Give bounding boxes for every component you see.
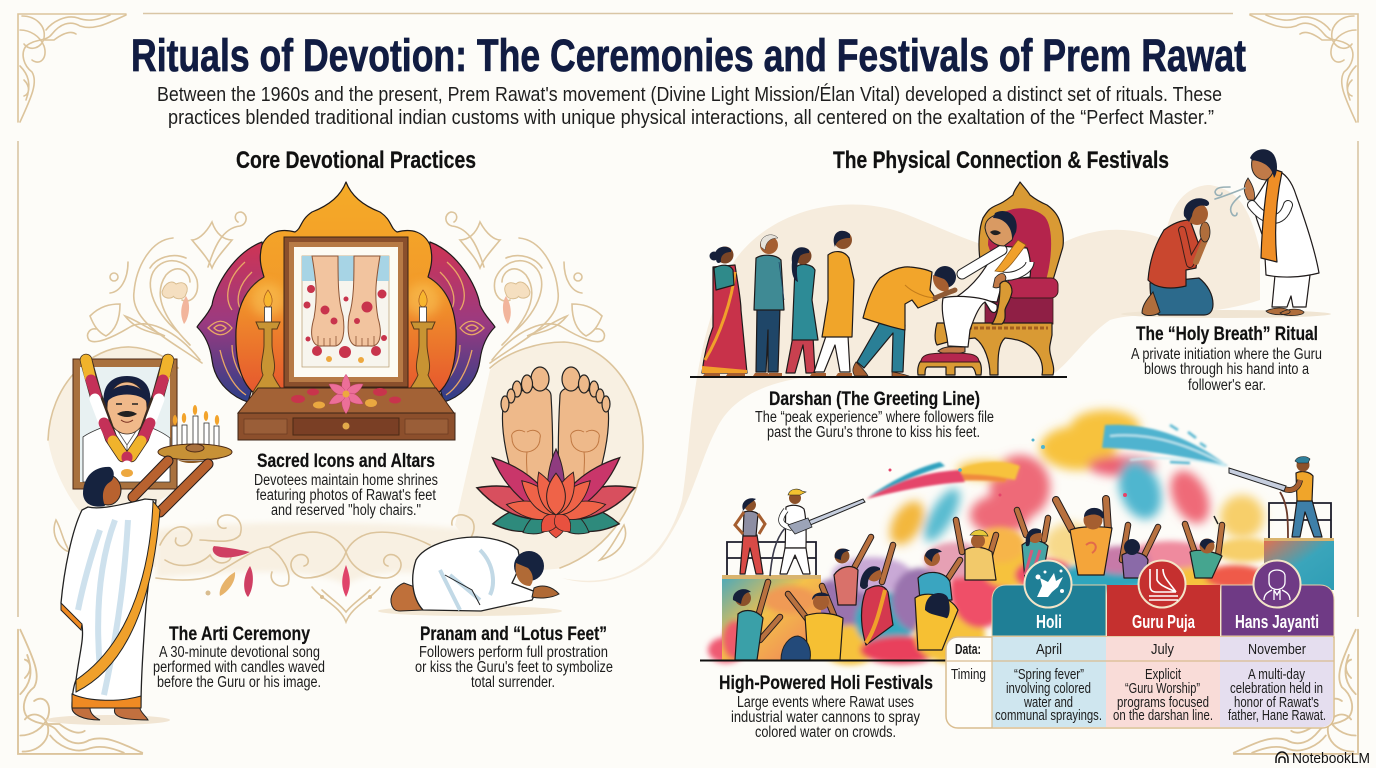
row: data: July	[1151, 641, 1174, 658]
woman in teal blouse	[1017, 510, 1048, 580]
text: holy breath: follower's ear.	[1188, 377, 1266, 394]
footstool	[918, 353, 981, 375]
text: pranam and lotus feet: Followers perform full prostration	[419, 644, 608, 661]
row: timing: A multi-day	[1248, 666, 1305, 683]
row: data: November	[1248, 641, 1306, 658]
text: holi festivals: colored water on crowds.	[755, 724, 896, 741]
text: pranam and lotus feet	[415, 624, 613, 691]
row: data	[955, 641, 1306, 658]
woman in teal dress	[786, 247, 818, 373]
seated guru	[938, 211, 1031, 354]
row: data: Data:	[955, 641, 981, 658]
row: data: April	[1036, 641, 1062, 658]
text: darshan: Darshan (The Greeting Line)	[769, 389, 980, 410]
text: arti ceremony	[153, 624, 325, 691]
right platform with cannon operator	[1229, 457, 1334, 590]
background wash: connecting swoosh	[562, 185, 1260, 582]
text: darshan: past the Guru's throne to kiss his feet.	[767, 424, 980, 441]
icon: notebook logo	[1276, 752, 1288, 763]
man in orange kurta	[810, 231, 854, 376]
text: holi festivals	[719, 673, 933, 741]
row: timing: water and	[1023, 694, 1073, 711]
row: timing: involving colored	[1006, 680, 1091, 697]
left spray	[866, 462, 1020, 499]
background wash: left beige blobs	[48, 342, 643, 585]
row: timing	[951, 666, 1326, 724]
text: holy breath: A private initiation where the Guru	[1131, 346, 1322, 363]
text: holi festivals: High-Powered Holi Festivals	[719, 673, 933, 694]
man in teal with bottle	[1185, 516, 1222, 578]
man in pink shirt	[834, 537, 871, 605]
text: holy breath	[1131, 324, 1322, 394]
illustration: holi colour clouds and crowd	[700, 410, 1334, 665]
illustration: soles of lotus feet	[501, 367, 610, 512]
text: arti ceremony: The Arti Ceremony	[169, 624, 310, 645]
column tints	[946, 637, 1334, 728]
candle stands	[252, 290, 439, 401]
text: holy breath: blows through his hand into a	[1144, 361, 1309, 378]
text: darshan: The “peak experience” where followers file	[755, 409, 994, 426]
header: hans jayanti: Hans Jayanti	[1235, 612, 1319, 632]
text: sacred icons and altars: and reserved "holy chairs."	[271, 502, 421, 519]
candle glow	[251, 283, 440, 317]
text: holi festivals: industrial water cannons to spray	[731, 709, 920, 726]
ornament: filigree behind altar	[88, 212, 604, 363]
intro text: Between the 1960s and the present, Prem Rawat's movement (Divine Light Mission/Élan Vital) developed a distinct set of rituals. These	[157, 83, 1222, 106]
man in green hat	[956, 520, 996, 580]
text: sacred icons and altars: Devotees maintain home shrines	[254, 472, 438, 489]
text: sacred icons and altars	[254, 451, 438, 519]
row: timing: father, Hane Rawat.	[1228, 707, 1326, 724]
woman in red sari	[702, 246, 747, 376]
wooden table with drawer	[238, 388, 455, 440]
ornament: central swirls	[54, 515, 626, 622]
man in yellow shirt	[781, 586, 843, 660]
heading: physical connection and festivals: The Physical Connection & Festivals	[833, 147, 1169, 174]
framed photo of feet	[284, 237, 408, 387]
colour clouds	[708, 410, 1275, 665]
icon: feet	[1149, 569, 1178, 600]
text: arti ceremony: A 30-minute devotional song	[159, 644, 320, 661]
festival data table	[946, 560, 1334, 728]
right spray	[1102, 425, 1228, 466]
ground line under darshan	[690, 376, 1067, 378]
illustration: prostrating devotee	[378, 537, 562, 616]
illustration: altar shrine	[197, 182, 495, 440]
row: timing: programs focused	[1117, 694, 1209, 711]
row: timing: celebration held in	[1230, 680, 1323, 697]
illustration: greeting line of followers	[702, 231, 854, 376]
pink flower and petals	[291, 374, 401, 414]
bowing follower	[853, 266, 956, 377]
breath swirls	[1215, 187, 1245, 216]
woman in red sari with raised arm	[860, 545, 893, 645]
throne arm scroll	[992, 281, 1012, 324]
intro text: practices blended traditional indian customs with unique physical interactions, all centered on the exaltation of the “Perfect Master.”	[168, 107, 1214, 129]
confetti	[888, 438, 1127, 497]
crowd figures	[733, 499, 1222, 660]
header: hans jayanti	[1221, 560, 1334, 636]
table body	[946, 637, 1334, 728]
illustration: lotus flower	[473, 449, 639, 541]
heading: core devotional practices: Core Devotional Practices	[236, 147, 476, 174]
row: timing: communal sprayings.	[995, 707, 1102, 724]
NotebookLM watermark: NotebookLM	[1292, 751, 1370, 767]
row: timing: Timing	[951, 666, 986, 683]
header: guru puja	[1107, 560, 1220, 636]
row: timing: “Guru Worship”	[1125, 680, 1200, 697]
text: holy breath: The “Holy Breath” Ritual	[1136, 324, 1318, 345]
person in purple, back to viewer	[1122, 525, 1158, 578]
throne seat and base	[935, 278, 1058, 375]
text: sacred icons and altars: featuring photos of Rawat's feet	[256, 487, 437, 504]
icon: splash	[1036, 570, 1064, 597]
row: timing: on the darshan line.	[1113, 707, 1213, 724]
text: arti ceremony: before the Guru or his image.	[157, 674, 321, 691]
text: sacred icons and altars: Sacred Icons and Altars	[257, 451, 435, 472]
row: timing: “Spring fever”	[1014, 666, 1084, 683]
intro text	[157, 83, 1222, 129]
kneeling follower	[1142, 198, 1213, 316]
illustration: arti plate with candles	[158, 405, 232, 463]
side lobes	[197, 242, 495, 402]
older man in teal	[753, 235, 784, 376]
text: arti ceremony: performed with candles waved	[153, 659, 325, 676]
text: pranam and lotus feet: or kiss the Guru's feet to symbolize	[415, 659, 613, 676]
illustration: guru portrait with garland	[73, 359, 177, 489]
icon: person	[1264, 570, 1290, 600]
header: holi	[992, 560, 1106, 636]
left platform with onlookers	[722, 489, 865, 660]
row: timing: honor of Rawat's	[1234, 694, 1319, 711]
text: pranam and lotus feet: total surrender.	[471, 674, 555, 691]
man in teal with hand raised	[733, 582, 780, 660]
man in orange shirt cheering	[1056, 499, 1112, 575]
ground line	[700, 660, 946, 662]
header: guru puja: Guru Puja	[1132, 612, 1196, 632]
row: timing: Explicit	[1145, 666, 1182, 683]
illustration: throne and seated guru	[853, 182, 1063, 377]
header: holi: Holi	[1036, 612, 1062, 632]
text: pranam and lotus feet: Pranam and “Lotus Feet”	[420, 624, 607, 645]
illustration: woman performing arti	[46, 461, 208, 725]
illustration: holy breath ritual	[1121, 149, 1331, 318]
text: darshan	[755, 389, 994, 441]
text: holi festivals: Large events where Rawat uses	[737, 694, 914, 711]
crowd colour base	[708, 527, 1275, 665]
standing guru blowing	[1244, 149, 1319, 316]
arch	[236, 182, 456, 396]
throne back	[979, 182, 1063, 280]
man in teal behind, woman with dark hair	[915, 549, 960, 650]
